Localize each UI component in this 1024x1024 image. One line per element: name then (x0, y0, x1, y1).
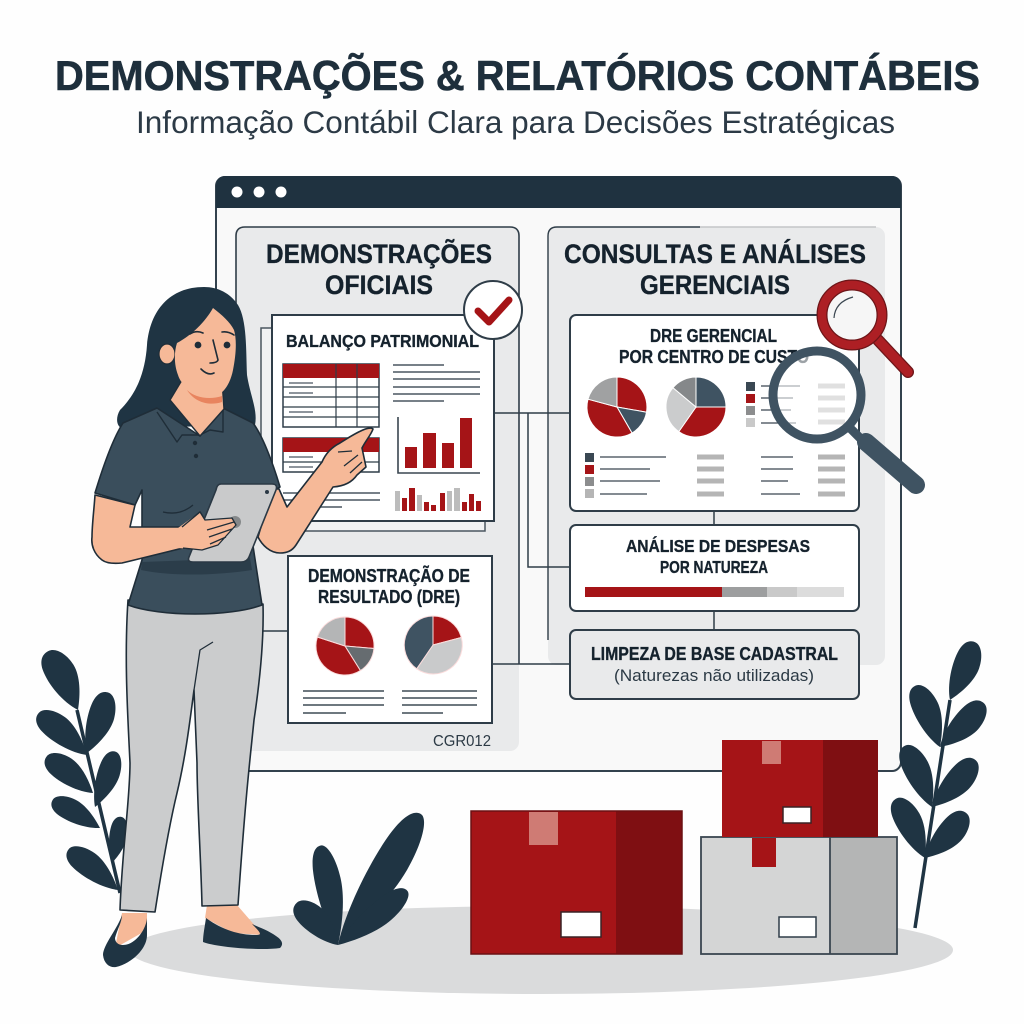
collar (157, 410, 223, 442)
neck shadow (187, 390, 222, 404)
facial features (190, 332, 234, 374)
document title: DEMONSTRAÇÃO DE (308, 565, 470, 586)
document title: BALANÇO PATRIMONIAL (286, 331, 479, 351)
connector lines (262, 413, 714, 664)
legend top (746, 382, 845, 427)
buttons (193, 441, 198, 458)
box: red top (722, 740, 878, 837)
table 2 (283, 438, 379, 472)
subtitle: Informação Contábil Clara para Decisões Estratégicas (136, 104, 895, 140)
pie chart 2 (666, 377, 726, 437)
neck (170, 380, 224, 436)
plant: left (31, 644, 131, 900)
heading: consultas e análises gerenciais: GERENCIAIS (640, 270, 790, 300)
card: limpeza de base cadastral (570, 630, 859, 699)
shirt shadow under tablet (141, 558, 252, 575)
legend bottom (585, 453, 845, 498)
icon: check badge (464, 281, 522, 339)
card title: DRE GERENCIAL (650, 326, 777, 346)
plant: right (886, 637, 994, 928)
heading: demonstrações oficiais (266, 238, 492, 300)
table 1 (283, 364, 379, 427)
card text: (Naturezas não utilizadas) (614, 667, 814, 685)
footer code: CGR012 (433, 733, 491, 750)
heading: consultas e análises gerenciais: CONSULTAS E ANÁLISES (564, 238, 866, 269)
icon: red magnifier (822, 285, 908, 372)
feet and shoes (103, 905, 282, 967)
left arm (92, 495, 236, 563)
card title: POR NATUREZA (660, 557, 768, 577)
panel: consultas e análises gerenciais (548, 227, 885, 665)
text lines (393, 365, 480, 401)
title: DEMONSTRAÇÕES & RELATÓRIOS CONTÁBEIS (55, 51, 980, 99)
document: balanço patrimonial (261, 315, 494, 531)
shirt fold (163, 505, 193, 513)
card title (626, 535, 810, 577)
card: análise de despesas por natureza (570, 525, 859, 611)
document title: RESULTADO (DRE) (318, 586, 460, 607)
tablet (188, 484, 276, 562)
face (175, 308, 236, 397)
pie chart 1 (587, 377, 647, 437)
bar chart (398, 417, 480, 473)
card title: ANÁLISE DE DESPESAS (626, 535, 810, 556)
trouser crease (194, 642, 213, 690)
trousers (120, 600, 263, 912)
icon: dark magnifier (773, 351, 916, 485)
card title: POR CENTRO DE CUSTO (619, 347, 809, 367)
panel: demonstrações oficiais (236, 227, 519, 751)
stacked bar (585, 587, 844, 597)
text lines (303, 691, 477, 713)
ground shadow (129, 906, 953, 994)
hand outline and fingers (182, 512, 236, 550)
lower text lines (283, 493, 380, 507)
pie chart 1 (316, 617, 374, 675)
card: dre gerencial por centro de custo (570, 315, 859, 511)
mini bar chart (395, 488, 481, 511)
browser window (216, 176, 901, 771)
finger lines (338, 451, 362, 473)
card text (591, 644, 838, 685)
box: large red (471, 811, 682, 954)
hair (117, 287, 256, 428)
heading: demonstrações oficiais: DEMONSTRAÇÕES (266, 238, 492, 269)
right arm pointing (258, 428, 373, 553)
card text: LIMPEZA DE BASE CADASTRAL (591, 644, 838, 664)
hand on tablet (178, 512, 236, 550)
ear (159, 344, 175, 364)
document: demonstração de resultado (288, 556, 492, 723)
woman presenter (92, 287, 373, 967)
plant: middle (288, 806, 437, 955)
heading: demonstrações oficiais: OFICIAIS (325, 270, 433, 300)
heading: consultas e análises gerenciais (564, 238, 866, 300)
document title (308, 565, 470, 607)
card title (619, 326, 809, 367)
pie chart 2 (404, 616, 462, 674)
shirt (95, 408, 280, 614)
box: gray bottom (701, 837, 897, 954)
